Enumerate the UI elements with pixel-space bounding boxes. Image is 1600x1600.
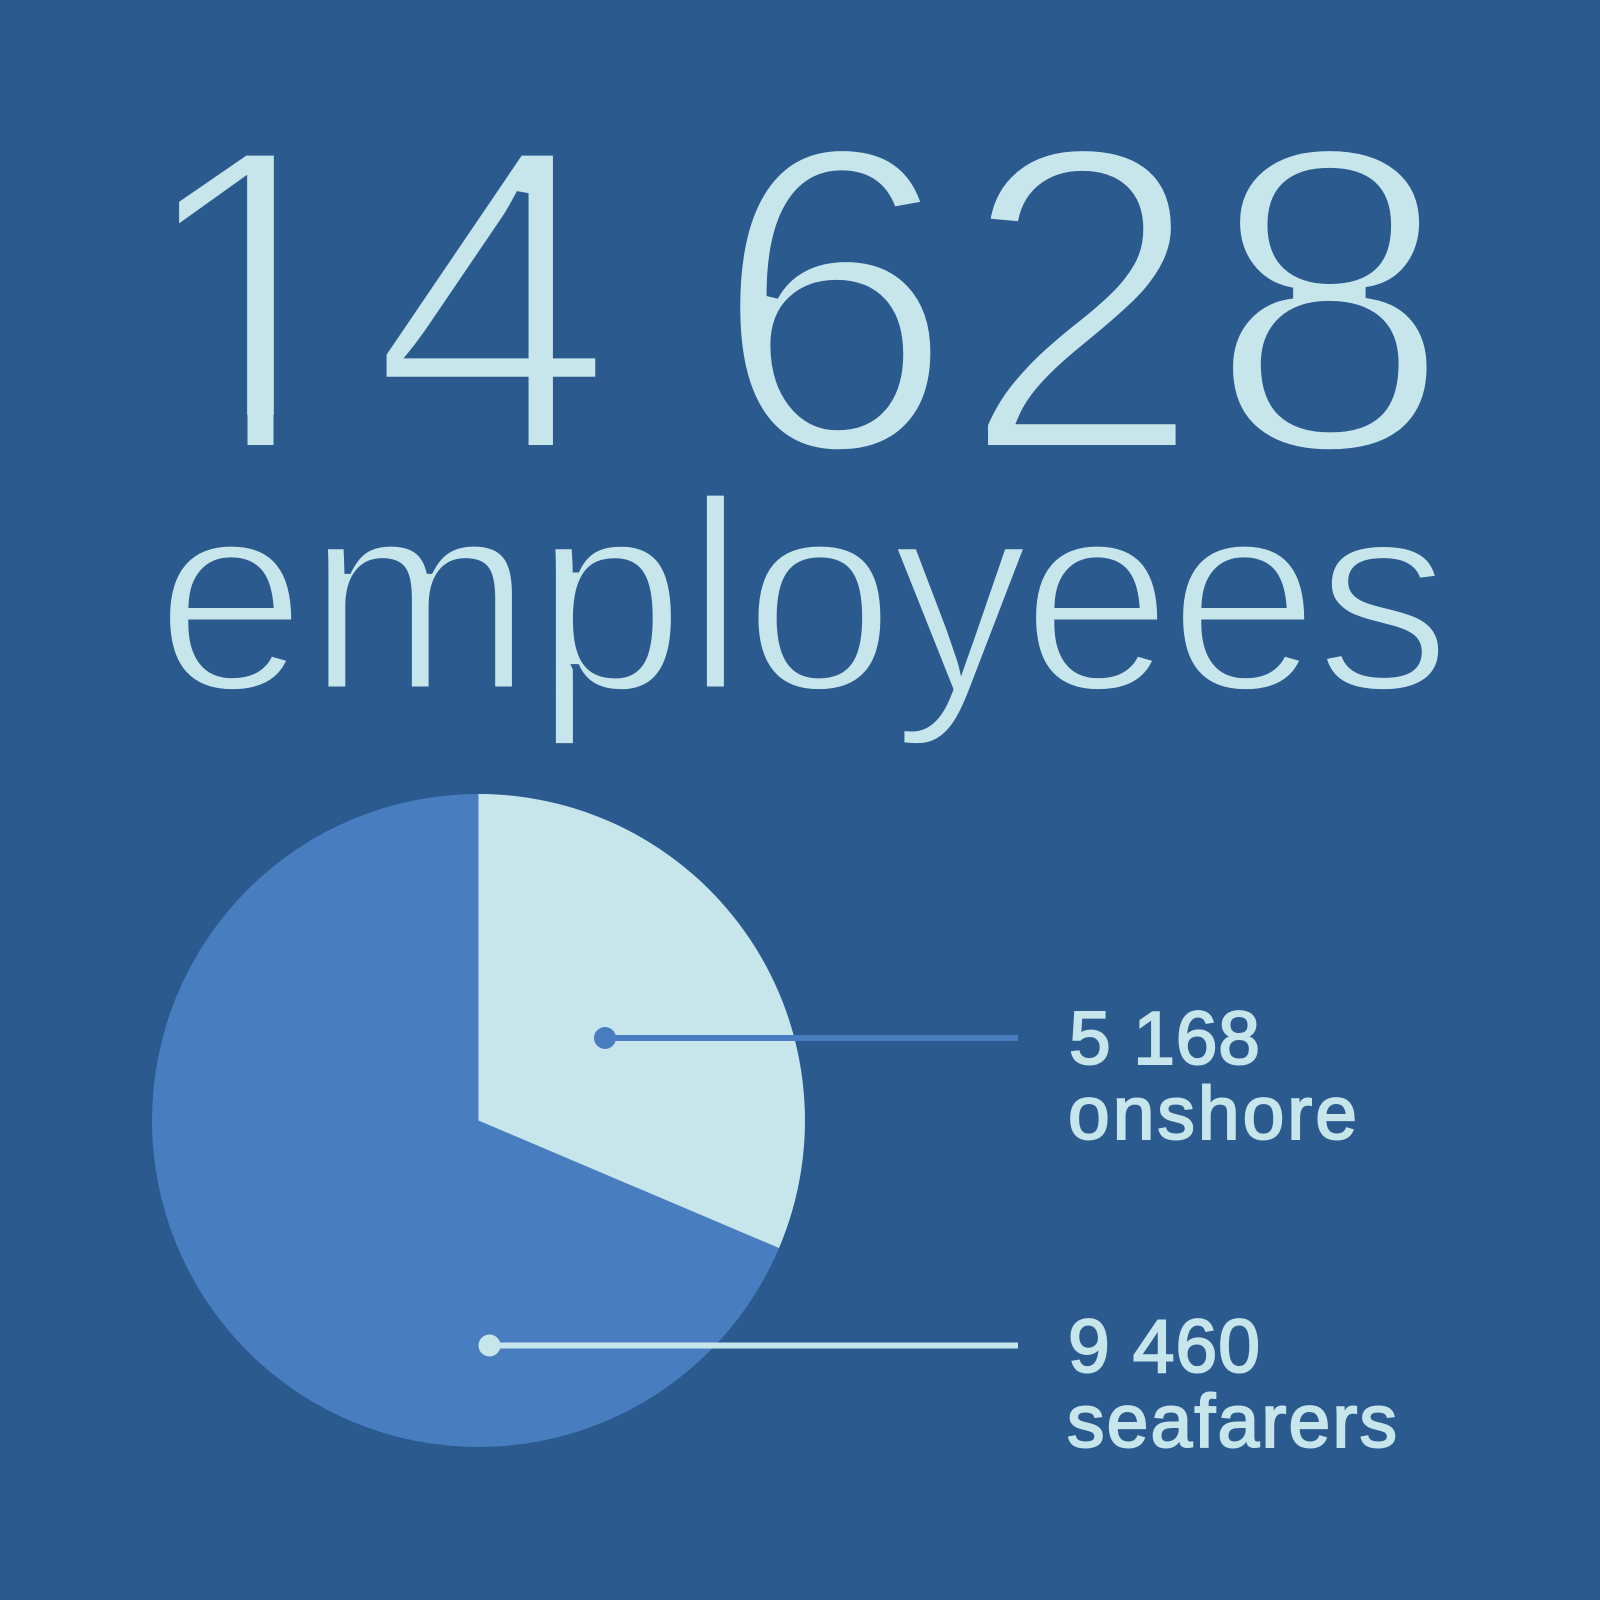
pie chart: onshore vs seafarers (152, 794, 805, 1447)
leader line: onshore (594, 1027, 1018, 1049)
pie slice: onshore (478, 794, 805, 1248)
pie slice: seafarers (152, 794, 805, 1447)
label: seafarers count: 9 460 (1068, 1304, 1260, 1388)
label: seafarers: seafarers (1067, 1379, 1397, 1463)
title: total headcount number: 14 628 (131, 54, 1452, 544)
label: onshore count: 5 168 (1069, 996, 1260, 1080)
label: onshore: onshore (1068, 1071, 1357, 1155)
leader line: seafarers (478, 1334, 1018, 1356)
heading: employees: employees (155, 443, 1452, 750)
